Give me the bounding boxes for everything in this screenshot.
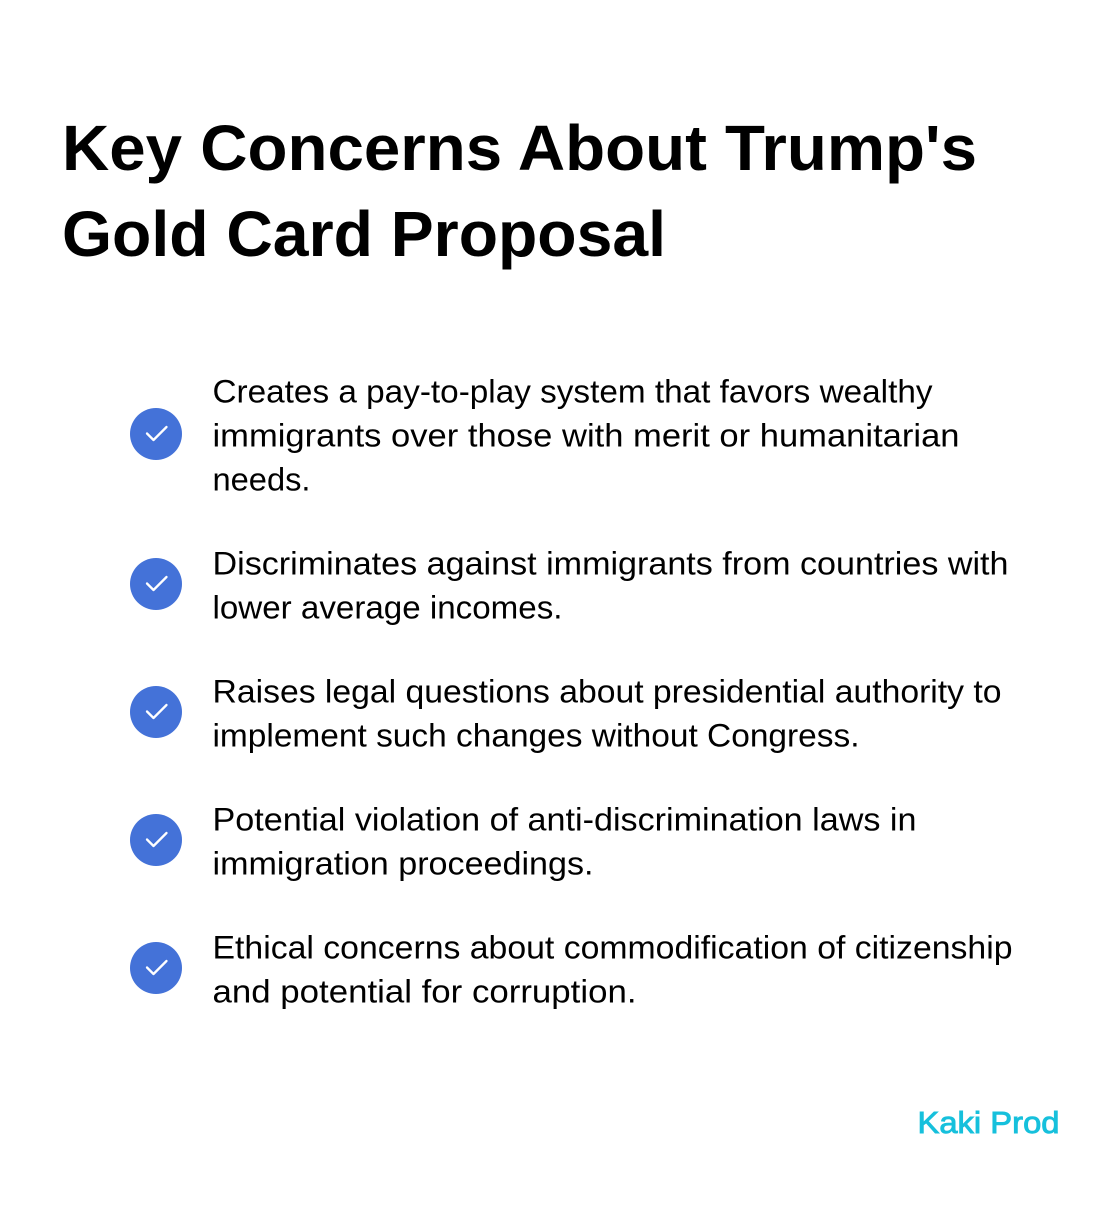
item 4 bbox=[130, 802, 917, 882]
text: discrimination by income bbox=[212, 546, 1008, 626]
concerns list bbox=[130, 374, 1012, 1010]
item 5 bbox=[130, 930, 1012, 1010]
item 3 bbox=[130, 674, 1002, 754]
item 2 bbox=[130, 546, 1008, 626]
icon: check badge 1 bbox=[130, 408, 182, 460]
logo: Kaki Prod: Kaki Prod bbox=[918, 1105, 1060, 1140]
text: discrimination by income: Discriminates against immigrants from countries with bbox=[212, 546, 1008, 582]
text: pay-to-play: Creates a pay-to-play system that favors wealthy bbox=[212, 374, 933, 410]
icon: check badge 5 bbox=[130, 942, 182, 994]
text: discrimination by income: lower average incomes. bbox=[212, 590, 562, 626]
text: anti-discrimination laws: immigration proceedings. bbox=[212, 846, 594, 882]
text: ethical concerns bbox=[212, 930, 1012, 1010]
title: Key Concerns About Trump's bbox=[62, 112, 977, 184]
text: legal questions bbox=[212, 674, 1002, 754]
text: ethical concerns: and potential for corruption. bbox=[212, 974, 636, 1010]
text: pay-to-play: needs. bbox=[212, 462, 310, 498]
icon: check badge 2 bbox=[130, 558, 182, 610]
item 1 bbox=[130, 374, 960, 498]
title: Gold Card Proposal bbox=[62, 198, 666, 270]
text: anti-discrimination laws: Potential violation of anti-discrimination laws in bbox=[212, 802, 917, 838]
text: anti-discrimination laws bbox=[212, 802, 917, 882]
text: legal questions: implement such changes without Congress. bbox=[212, 718, 860, 754]
text: ethical concerns: Ethical concerns about commodification of citizenship bbox=[212, 930, 1012, 966]
text: pay-to-play bbox=[212, 374, 960, 498]
icon: check badge 4 bbox=[130, 814, 182, 866]
title bbox=[62, 112, 977, 270]
icon: check badge 3 bbox=[130, 686, 182, 738]
text: pay-to-play: immigrants over those with merit or humanitarian bbox=[212, 418, 960, 454]
text: legal questions: Raises legal questions about presidential authority to bbox=[212, 674, 1002, 710]
